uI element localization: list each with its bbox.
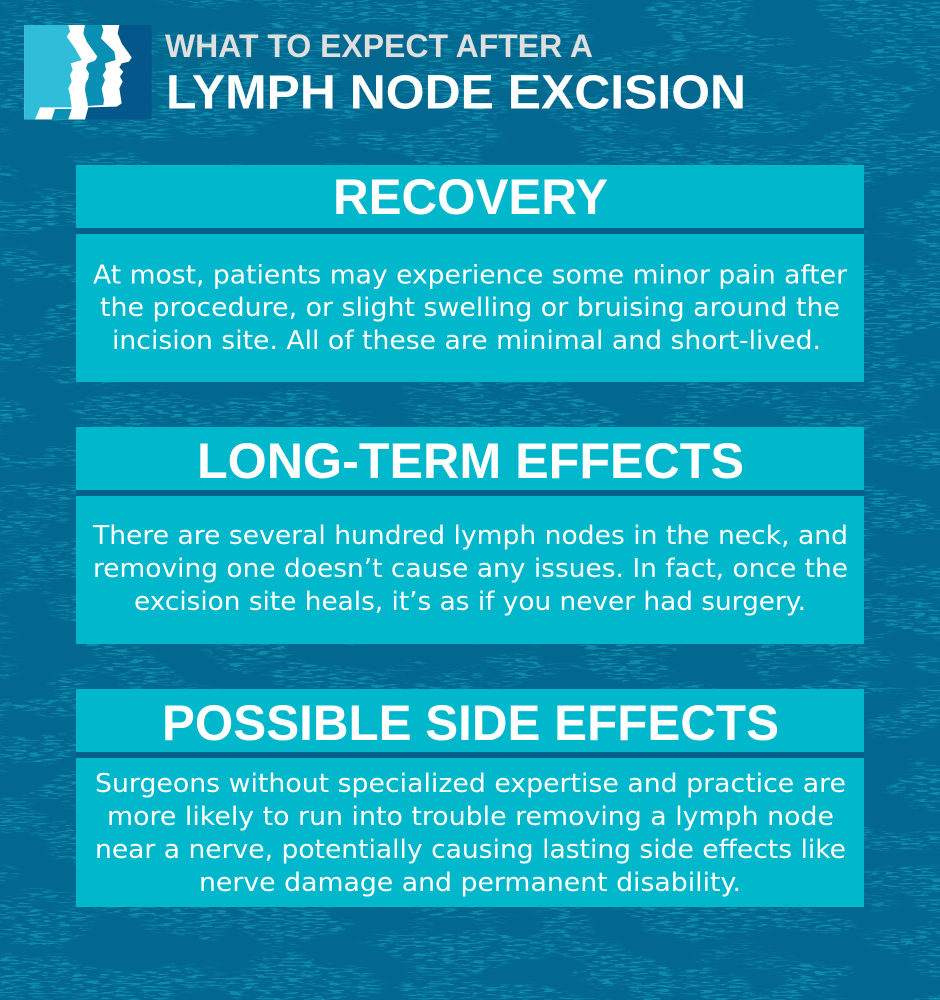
recovery text: incision site. All of these are minimal and short-lived.: [112, 326, 821, 356]
title line 2: LYMPH NODE EXCISION: [166, 66, 746, 120]
recovery text: [76, 234, 864, 382]
long-term effects text: There are several hundred lymph nodes in the neck, and: [92, 521, 848, 551]
panel: possible side effects: [76, 689, 864, 907]
possible side effects text: more likely to run into trouble removing a lymph node: [107, 802, 834, 832]
possible side effects heading: POSSIBLE SIDE EFFECTS: [162, 695, 779, 751]
long-term effects text: excision site heals, it’s as if you never had surgery.: [134, 587, 806, 617]
long-term effects text: removing one doesn’t cause any issues. In fact, once the: [93, 554, 848, 584]
recovery heading: RECOVERY: [333, 169, 608, 225]
logo: overlapping face profiles: [24, 25, 152, 119]
possible side effects text: near a nerve, potentially causing lasting side effects like: [95, 835, 846, 865]
long-term effects text: [76, 496, 864, 644]
possible side effects text: Surgeons without specialized expertise and practice are: [95, 769, 846, 799]
recovery text: At most, patients may experience some minor pain after: [93, 260, 847, 290]
long-term effects heading: [76, 427, 864, 490]
title: [165, 28, 746, 120]
possible side effects text: nerve damage and permanent disability.: [199, 868, 741, 898]
possible side effects text: [76, 758, 864, 907]
title line 1: WHAT TO EXPECT AFTER A: [165, 28, 593, 64]
long-term effects heading: LONG-TERM EFFECTS: [197, 433, 744, 489]
panel: long-term effects: [76, 427, 864, 644]
recovery text: the procedure, or slight swelling or bruising around the: [100, 293, 840, 323]
recovery heading: [76, 165, 864, 228]
panel: recovery: [76, 165, 864, 382]
